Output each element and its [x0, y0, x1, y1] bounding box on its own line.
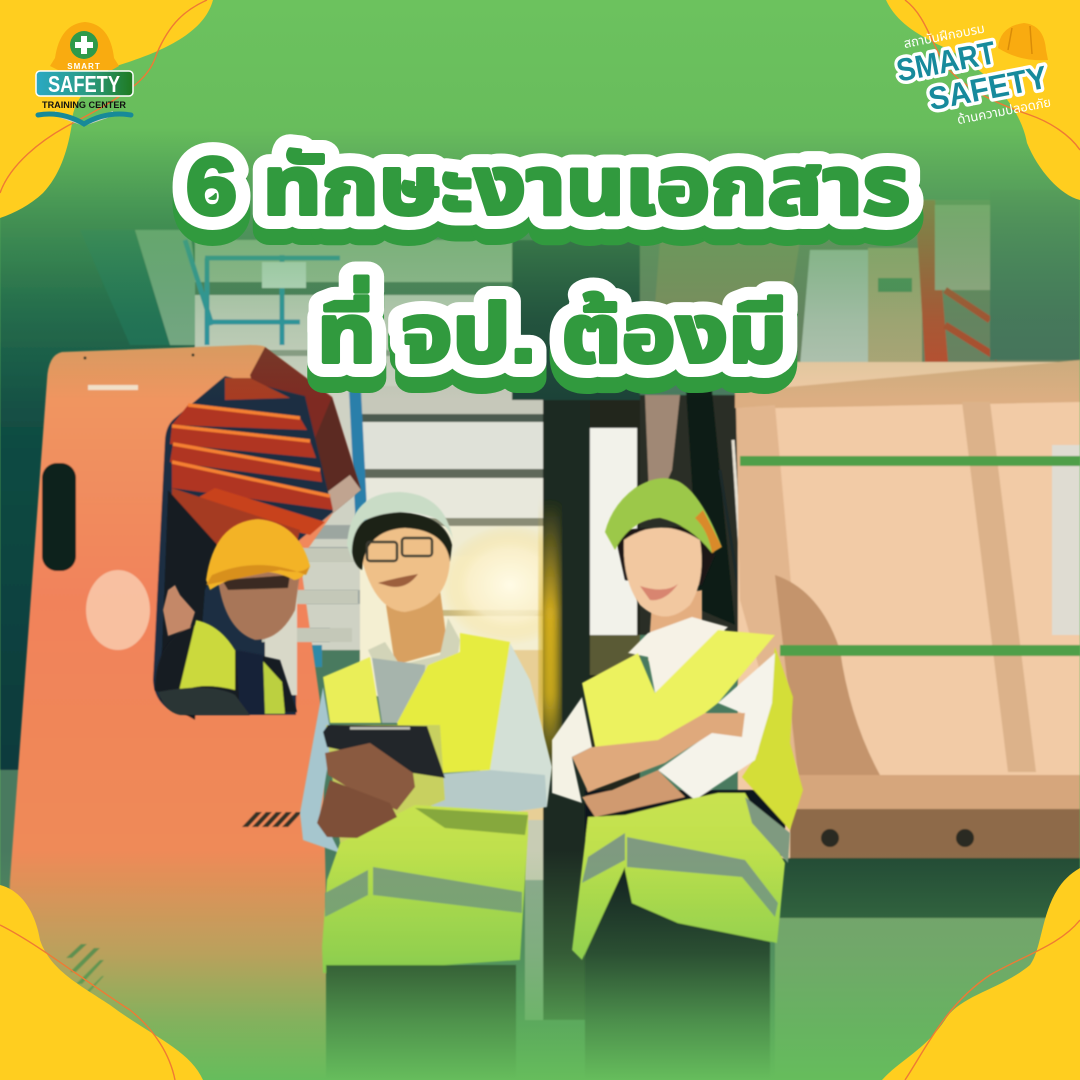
- title line 1: 6 ทักษะงานเอกสาร: [186, 141, 910, 232]
- steering wheel: [158, 688, 250, 715]
- title line 2: ที่ จป. ต้องมี: [317, 292, 787, 396]
- title line 2: ที่ จป. ต้องมี: [317, 276, 787, 380]
- warehouse roof stripes: [195, 240, 580, 1020]
- logo: Smart Safety Training Center: SMART: [67, 62, 101, 71]
- logo: Smart Safety (right): SAFETY: [925, 59, 1050, 117]
- logo: Smart Safety (right): สถาบันฝึกอบรม: [902, 21, 986, 51]
- title: [186, 141, 910, 396]
- central mast column: [512, 240, 640, 400]
- straps near crate: [720, 440, 745, 630]
- side vest: [742, 647, 803, 830]
- icon: helmet with cross: [50, 22, 119, 70]
- logo: Smart Safety (right): SMART: [893, 34, 999, 89]
- hazard stripes: [242, 812, 302, 827]
- right background racks: [640, 200, 1080, 370]
- dark cab interior: [160, 490, 222, 720]
- pants: [585, 790, 790, 1080]
- title line 1: 6 ทักษะงานเอกสาร: [186, 157, 910, 248]
- upper vest: [582, 630, 775, 750]
- icon: open book: [38, 111, 131, 126]
- head: [362, 523, 450, 612]
- stairs seen through window: [262, 548, 362, 642]
- logo: Smart Safety Training Center: TRAINING CENTER: [42, 100, 126, 111]
- head: [218, 572, 300, 640]
- stairs behind cab: [265, 525, 363, 642]
- blue scaffold: [185, 240, 340, 345]
- logo: Smart Safety Training Center: [36, 22, 133, 126]
- title line 1: 6 ทักษะงานเอกสาร: [186, 141, 910, 232]
- white panel on mast: [590, 428, 637, 635]
- corner: bottom right yellow: [882, 868, 1080, 1080]
- shirt arms: [410, 643, 552, 822]
- tablet: [323, 725, 445, 778]
- collar: [628, 617, 728, 693]
- neck: [648, 590, 702, 690]
- icon: yellow helmet: [998, 23, 1048, 60]
- orange roof slats: [170, 378, 333, 580]
- corner: top left yellow: [0, 0, 213, 218]
- cardboard boxes: [868, 248, 922, 365]
- neck and collar: [386, 590, 448, 665]
- arms: [582, 770, 685, 817]
- reflective strip: [325, 867, 522, 917]
- forklift cab: [0, 345, 362, 1080]
- lower vest: [625, 793, 785, 943]
- right sleeve: [658, 653, 775, 800]
- logo: Smart Safety (right): [891, 11, 1053, 137]
- hands: [325, 743, 415, 810]
- pants: [326, 965, 516, 1080]
- upper vest: [323, 657, 381, 723]
- title line 2: ที่ จป. ต้องมี: [317, 276, 787, 380]
- title line 2: [317, 276, 787, 396]
- left sleeve: [552, 697, 592, 803]
- side window slot: [42, 463, 76, 571]
- head: [624, 528, 702, 616]
- red interior frame: [250, 347, 361, 542]
- corner: bottom left yellow: [0, 885, 203, 1080]
- corner: top right yellow: [886, 0, 1080, 200]
- hair: [614, 525, 715, 590]
- reflective strip: [582, 797, 790, 917]
- person: woman in green helmet: [552, 478, 803, 1080]
- bottom green fade: [0, 850, 1080, 1080]
- person: man with tablet: [300, 492, 552, 1080]
- lower hazard stripes: [66, 944, 104, 996]
- helmet: [605, 478, 722, 553]
- helmet: [347, 492, 453, 560]
- cab window opening: [153, 376, 333, 715]
- logo: Smart Safety Training Center: SAFETY: [48, 71, 120, 97]
- lower vest: [322, 805, 528, 973]
- top green fade: [0, 0, 1080, 400]
- person: driver in yellow helmet: [155, 519, 310, 715]
- logo: Smart Safety (right): ด้านความปลอดภัย: [956, 94, 1052, 127]
- wooden crate: [735, 360, 1080, 918]
